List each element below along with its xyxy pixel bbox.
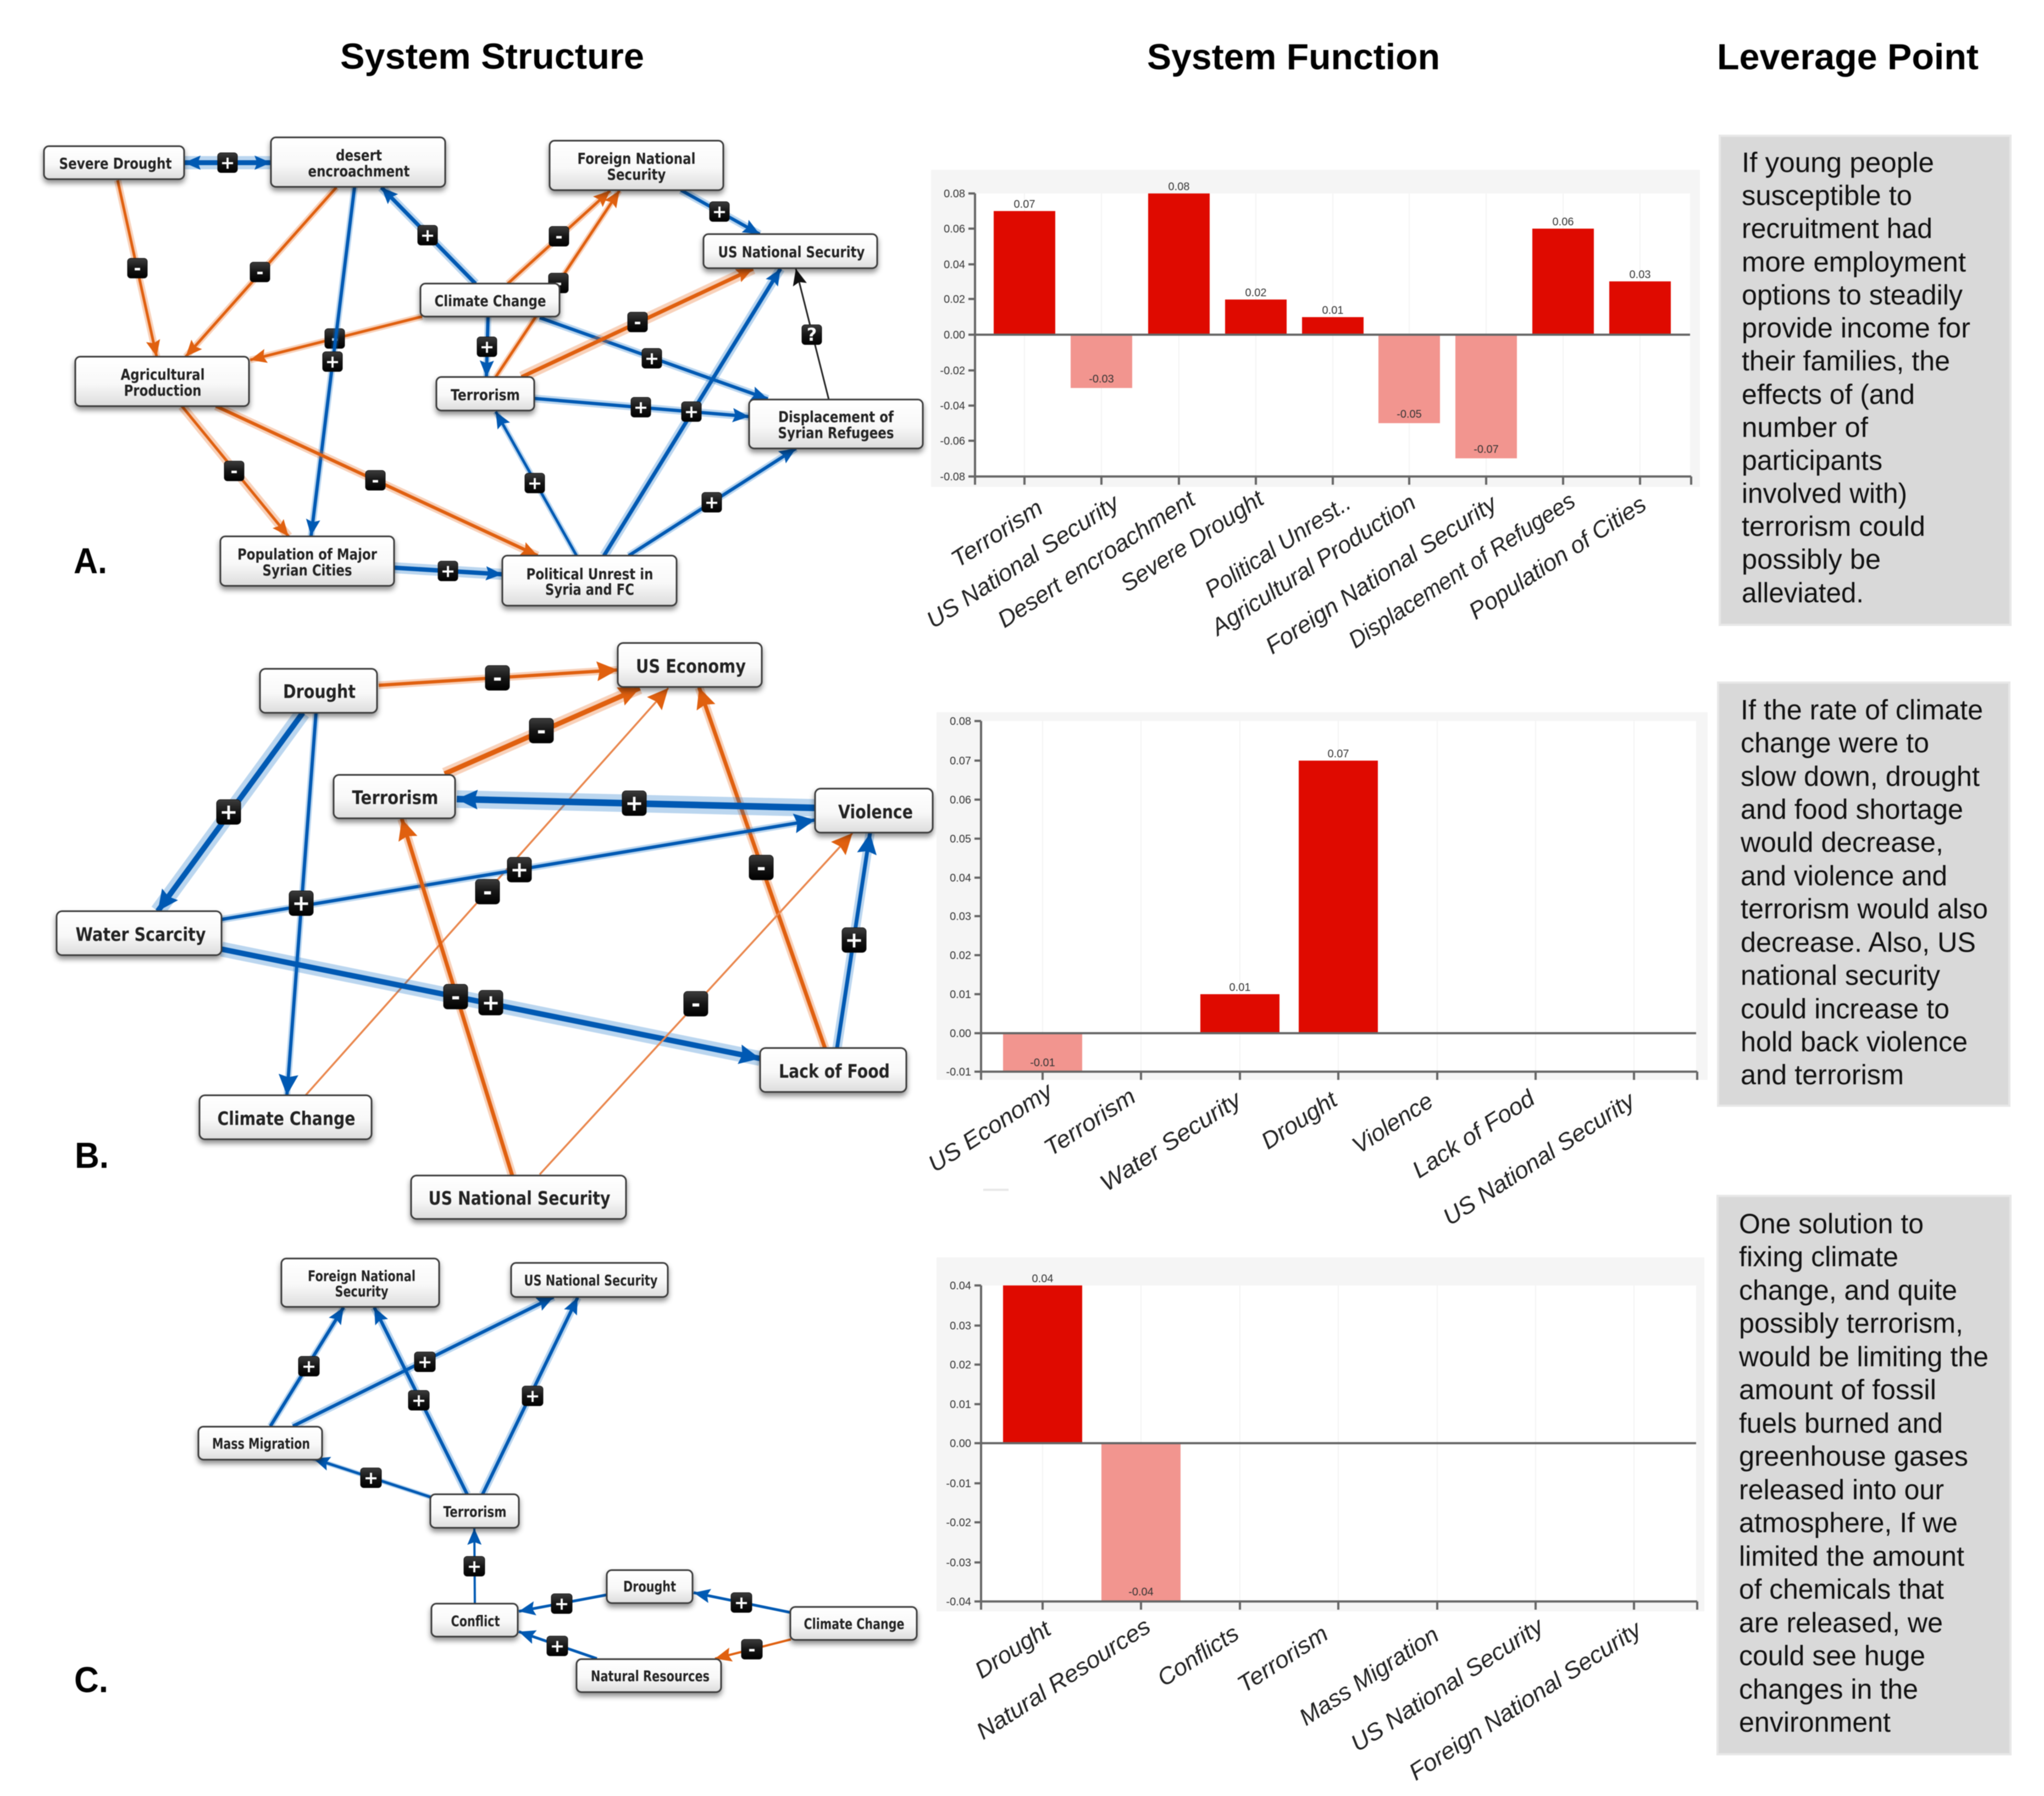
- node: Political Unrest in Syria and FC: Political Unrest in: [527, 565, 653, 583]
- y axis labels: 0.08: [944, 188, 965, 200]
- y axis labels: 0.05: [950, 833, 971, 845]
- category labels: Water Security: [1095, 1085, 1247, 1196]
- y axis labels: -0.03: [946, 1557, 971, 1569]
- arrow: Conflict to Terrorism: +: [467, 1556, 481, 1577]
- bars: [1003, 761, 1378, 1072]
- arrow: Climate Change to Terrorism: [477, 317, 497, 377]
- node: US National Security: [411, 1176, 626, 1219]
- arrow: Climate Change to Terrorism: +: [480, 336, 494, 357]
- value labels: [1030, 748, 1349, 1069]
- heading: System Function: System Function: [1147, 36, 1440, 77]
- arrow: Lack of Food to Violence: [837, 833, 870, 1048]
- text panel: leverage point A: [1720, 136, 2010, 625]
- category labels: Conflicts: [1153, 1620, 1244, 1692]
- node: Population of Major Syrian Cities: [220, 536, 394, 586]
- heading: System Structure: System Structure: [340, 36, 644, 76]
- node: Terrorism: Terrorism: [443, 1504, 507, 1521]
- text panel: leverage point C: change, and quite: [1739, 1274, 1957, 1306]
- value labels: -0.03: [1089, 373, 1114, 385]
- arrow: Violence to Terrorism: [457, 791, 815, 816]
- text panel: leverage point C: fuels burned and: [1739, 1407, 1943, 1439]
- arrow: Severe Drought and desert encroachment feedback: [184, 152, 271, 173]
- node: Climate Change: [200, 1095, 372, 1139]
- arrow: Climate Change to desert encroachment: [381, 187, 475, 284]
- arrow: Agricultural Production to Political Unrest: [216, 406, 538, 556]
- arrow: Political Unrest to Terrorism: +: [528, 473, 542, 494]
- arrow: Political Unrest to US National Security: [604, 269, 780, 556]
- node: US National Security: [511, 1263, 668, 1297]
- y axis labels: 0.02: [950, 950, 971, 962]
- category labels: Foreign National Security: [1261, 490, 1503, 659]
- arrow: Climate Change to Natural Resources: [715, 1639, 791, 1660]
- text panel: leverage point C: [1718, 1196, 2010, 1754]
- text panel: leverage point C: changes in the: [1739, 1673, 1918, 1705]
- arrow: Terrorism to US Economy: [445, 688, 640, 774]
- category labels: [923, 1077, 1641, 1230]
- text panel: leverage point B: [1718, 683, 2009, 1106]
- arrow: desert encroachment to Population of Major Syrian Cities: +: [325, 351, 340, 372]
- arrow: Climate Change to Displacement of Syrian Refugees: [540, 318, 768, 399]
- node: Displacement of Syrian Refugees: Displacement of: [778, 408, 894, 426]
- panel label: C: C.: [74, 1659, 108, 1700]
- value labels: -0.07: [1474, 444, 1499, 456]
- arrow: Water Scarcity to Violence: +: [510, 857, 529, 883]
- text panel: leverage point B: national security: [1741, 960, 1940, 991]
- node: Climate Change: Climate Change: [434, 292, 546, 310]
- arrow: Mass Migration to US National Security: [293, 1297, 553, 1426]
- arrow: Drought to US Economy: [379, 666, 618, 691]
- arrow: Political Unrest to US National Security: +: [684, 401, 699, 422]
- arrow: desert encroachment to Population of Major Syrian Cities: [311, 187, 354, 536]
- arrow: Terrorism to US National Security: -: [634, 312, 641, 332]
- node: Mass Migration: [198, 1427, 322, 1460]
- category labels: US National Security: [922, 489, 1125, 634]
- y axis labels: 0.01: [950, 1399, 971, 1411]
- node: Climate Change: Climate Change: [804, 1616, 905, 1633]
- y axis labels: 0.04: [950, 1280, 971, 1292]
- arrow: Political Unrest to Displacement of Syrian Refugees: +: [705, 492, 719, 513]
- arrow: Terrorism to Foreign National Security: +: [412, 1390, 426, 1411]
- category labels: Population of Cities: [1464, 491, 1651, 625]
- arrow: Terrorism to Foreign National Security: [496, 191, 619, 377]
- y axis labels: 0.07: [950, 755, 971, 767]
- node: US National Security: US National Security: [524, 1272, 658, 1289]
- arrow: Drought to Climate Change: [287, 713, 316, 1095]
- text panel: leverage point A: involved with): [1742, 478, 1907, 509]
- node: Terrorism: Terrorism: [352, 787, 439, 809]
- arrow: Violence to Terrorism: +: [625, 791, 644, 816]
- node: desert encroachment: encroachment: [308, 162, 410, 180]
- node: Drought: [607, 1570, 693, 1603]
- y axis labels: 0.03: [950, 1320, 971, 1332]
- node: US Economy: US Economy: [636, 656, 746, 678]
- arrow: Severe Drought to Agricultural Production: [118, 180, 157, 357]
- arrow: Displacement of Syrian Refugees to US National Security: ?: [807, 324, 817, 345]
- y axis labels: 0.08: [950, 716, 971, 728]
- text panel: leverage point A: options to steadily: [1742, 279, 1963, 311]
- y axis labels: 0.06: [950, 794, 971, 806]
- node: US National Security: US National Security: [429, 1188, 610, 1210]
- arrow: Climate Change to US Economy: -: [483, 879, 492, 905]
- y axis labels: 0.01: [950, 989, 971, 1001]
- text panel: leverage point A: effects of (and: [1742, 379, 1915, 410]
- arrow: Terrorism to US National Security: [483, 1298, 578, 1494]
- text panel: leverage point B: terrorism would also: [1741, 893, 1988, 924]
- arrow: Mass Migration to US National Security: +: [418, 1351, 432, 1372]
- arrow: Water Scarcity to Violence: [221, 820, 815, 919]
- category labels: Violence: [1348, 1088, 1438, 1159]
- arrow: Conflict to Terrorism: [464, 1528, 485, 1604]
- arrow: Lack of Food to US Economy: -: [757, 855, 766, 880]
- y axis labels: 0.02: [950, 1359, 971, 1371]
- category labels: [922, 485, 1651, 659]
- axes: [974, 1285, 1697, 1610]
- node: Population of Major Syrian Cities: Syrian Cities: [263, 561, 352, 579]
- text panel: leverage point C: environment: [1739, 1706, 1891, 1738]
- arrow: Natural Resources to Conflict: +: [550, 1636, 564, 1656]
- arrow: Climate Change to US Economy: [306, 688, 668, 1095]
- y axis labels: 0.00: [950, 1438, 971, 1450]
- arrow: Terrorism to Foreign National Security: -: [555, 273, 562, 293]
- node: Drought: Drought: [623, 1578, 676, 1595]
- node: Natural Resources: [577, 1659, 721, 1692]
- arrow: Agricultural Production to Population of Major Syrian Cities: -: [230, 461, 238, 481]
- arrow: Drought to Water Scarcity: [158, 713, 303, 911]
- node: Lack of Food: Lack of Food: [779, 1061, 890, 1083]
- chart: system function A: [922, 170, 1700, 659]
- node: Water Scarcity: [57, 911, 221, 955]
- arrow: Lack of Food to US Economy: [699, 688, 825, 1048]
- node: Terrorism: [430, 1494, 519, 1528]
- arrow: Terrorism to US Economy: -: [537, 718, 546, 744]
- arrow: Climate Change to Agricultural Production: [250, 317, 422, 360]
- category labels: [970, 1612, 1647, 1786]
- text panel: leverage point A: If young people: [1742, 147, 1934, 178]
- category labels: Lack of Food: [1408, 1084, 1541, 1184]
- text panel: leverage point C: greenhouse gases: [1739, 1440, 1968, 1472]
- y axis labels: -0.04: [946, 1596, 971, 1608]
- arrow: Agricultural Production to Population of Major Syrian Cities: [182, 406, 289, 536]
- text panel: leverage point B: hold back violence: [1741, 1026, 1968, 1057]
- panel: causal loop diagram A: [44, 137, 923, 606]
- text panel: leverage point C: are released, we: [1739, 1607, 1943, 1638]
- y axis labels: -0.01: [946, 1478, 971, 1490]
- value labels: -0.05: [1397, 408, 1422, 420]
- arrow: Drought to Climate Change: +: [292, 891, 311, 916]
- value labels: [1032, 1273, 1154, 1598]
- arrow: desert encroachment to Agricultural Production: -: [256, 262, 264, 282]
- category labels: Severe Drought: [1116, 485, 1270, 597]
- category labels: Displacement of Refugees: [1344, 487, 1580, 653]
- text panel: leverage point B: would decrease,: [1740, 827, 1943, 858]
- value labels: 0.08: [1168, 181, 1189, 193]
- node: Agricultural Production: Production: [124, 381, 201, 400]
- bars: [994, 193, 1671, 458]
- value labels: 0.03: [1630, 269, 1650, 281]
- arrow: Climate Change to desert encroachment: +: [420, 225, 435, 246]
- value labels: 0.01: [1322, 304, 1343, 317]
- y axis labels: -0.02: [940, 365, 965, 377]
- arrow: Drought to Conflict: +: [555, 1593, 569, 1614]
- y axis labels: -0.04: [940, 400, 965, 412]
- text panel: leverage point B: decrease. Also, US: [1741, 927, 1976, 958]
- y axis labels: 0.06: [944, 223, 965, 235]
- node: Foreign National Security: Foreign National: [577, 149, 696, 168]
- arrow: Climate Change to Natural Resources: -: [748, 1639, 756, 1660]
- arrow: Severe Drought to Agricultural Production: -: [134, 258, 141, 279]
- y axis labels: 0.04: [944, 259, 965, 271]
- category labels: Desert encroachment: [993, 485, 1201, 633]
- node: US National Security: [704, 234, 877, 268]
- node: Terrorism: [334, 775, 455, 818]
- node: Population of Major Syrian Cities: Population of Major: [237, 545, 377, 563]
- arrow: Political Unrest to Terrorism: [496, 412, 577, 556]
- arrow: Displacement of Syrian Refugees to US National Security: [796, 269, 829, 400]
- y axis labels: 0.00: [950, 1028, 971, 1040]
- node: Drought: Drought: [283, 681, 356, 703]
- arrow: Terrorism to Displacement of Syrian Refugees: [534, 397, 749, 418]
- value labels: 0.01: [1229, 982, 1250, 994]
- text panel: leverage point A: terrorism could: [1742, 511, 1925, 542]
- arrow: US National Security to Violence: [540, 833, 852, 1174]
- arrow: Natural Resources to Conflict: [519, 1632, 597, 1659]
- panel label: B: B.: [75, 1135, 109, 1176]
- node: Water Scarcity: Water Scarcity: [76, 924, 206, 946]
- y axis labels: [940, 188, 965, 483]
- text panel: leverage point C: amount of fossil: [1739, 1374, 1936, 1405]
- arrow: Climate Change to Displacement of Syrian Refugees: +: [645, 348, 659, 369]
- arrow: Mass Migration to Foreign National Security: [270, 1307, 344, 1426]
- arrow: Drought to US Economy: -: [493, 666, 502, 691]
- text panel: leverage point C: One solution to: [1739, 1208, 1924, 1239]
- chart: system function C: [937, 1257, 1704, 1786]
- panel label: A: A.: [74, 540, 107, 581]
- category labels: Terrorism: [1039, 1083, 1140, 1161]
- text panel: leverage point A: recruitment had: [1742, 213, 1932, 244]
- node: Foreign National Security: Security: [607, 165, 666, 184]
- arrow: US National Security to Terrorism: -: [451, 984, 460, 1010]
- category labels: Terrorism: [946, 495, 1048, 573]
- text panel: leverage point A: susceptible to: [1742, 180, 1912, 211]
- arrow: Lack of Food to Violence: +: [845, 928, 863, 953]
- node: Violence: [815, 789, 933, 833]
- node: Foreign National Security: [281, 1259, 439, 1307]
- category labels: Natural Resources: [972, 1613, 1155, 1745]
- arrow: Climate Change to Foreign National Security: [508, 191, 610, 284]
- category labels: Political Unrest..: [1200, 490, 1355, 603]
- heading: Leverage Point: Leverage Point: [1717, 36, 1979, 77]
- node: Drought: [260, 669, 377, 713]
- value labels: 0.04: [1032, 1273, 1053, 1285]
- node: Mass Migration: Mass Migration: [212, 1435, 310, 1453]
- node: Agricultural Production: [75, 357, 249, 406]
- y axis labels: -0.06: [940, 435, 965, 447]
- y axis labels: -0.01: [946, 1066, 971, 1078]
- arrow: US National Security to Violence: -: [691, 991, 700, 1017]
- arrow: Agricultural Production to Political Unrest: -: [372, 470, 379, 491]
- node: Displacement of Syrian Refugees: Syrian Refugees: [778, 424, 894, 442]
- node: desert encroachment: [271, 137, 445, 187]
- category labels: Mass Migration: [1294, 1621, 1444, 1731]
- arrow: Water Scarcity to Lack of Food: [221, 949, 760, 1058]
- arrow: desert encroachment to Agricultural Production: [186, 187, 336, 357]
- panel: causal loop diagram C: [198, 1259, 917, 1692]
- value labels: -0.04: [1128, 1586, 1154, 1598]
- y axis labels: -0.08: [940, 471, 965, 483]
- text panel: leverage point C: would be limiting the: [1738, 1341, 1988, 1372]
- arrow: Water Scarcity to Lack of Food: +: [481, 990, 500, 1016]
- text panel: leverage point B: and terrorism: [1741, 1059, 1904, 1090]
- category labels: Foreign National Security: [1404, 1615, 1647, 1786]
- y axis labels: 0.00: [944, 329, 965, 341]
- node: Foreign National Security: [550, 141, 723, 190]
- text panel: leverage point A: possibly be: [1742, 544, 1881, 575]
- node: Terrorism: Terrorism: [451, 386, 520, 404]
- arrow: Political Unrest to Displacement of Syrian Refugees: [629, 448, 796, 556]
- arrow: Severe Drought and desert encroachment feedback: +: [220, 152, 235, 173]
- y axis labels: 0.03: [950, 911, 971, 923]
- category labels: Terrorism: [1233, 1620, 1333, 1698]
- node: Climate Change: [790, 1607, 917, 1640]
- arrow: Terrorism to US National Security: [522, 269, 753, 377]
- y axis labels: 0.04: [950, 872, 971, 884]
- text panel: leverage point C: fixing climate: [1739, 1241, 1898, 1272]
- node: Agricultural Production: Agricultural: [121, 365, 204, 384]
- value labels: -0.01: [1030, 1057, 1055, 1069]
- text panel: leverage point C: released into our: [1739, 1474, 1944, 1505]
- arrow: Population of Major Syrian Cities to Political Unrest: +: [441, 561, 455, 581]
- node: Severe Drought: Severe Drought: [59, 154, 171, 173]
- node: US Economy: [618, 643, 762, 687]
- text panel: leverage point C: could see huge: [1739, 1640, 1925, 1671]
- arrow: Foreign National Security to US National Security: [681, 190, 760, 234]
- value labels: 0.02: [1245, 287, 1266, 299]
- category labels: US Economy: [923, 1077, 1059, 1178]
- category labels: Drought: [1256, 1086, 1343, 1155]
- arrow: US National Security to Terrorism: [402, 819, 512, 1176]
- node: Lack of Food: [760, 1048, 906, 1092]
- text panel: leverage point B: could increase to: [1741, 993, 1949, 1024]
- y axis labels: [946, 716, 971, 1078]
- arrow: Terrorism to Displacement of Syrian Refugees: +: [634, 397, 648, 418]
- arrow: Climate Change to Agricultural Production: -: [331, 328, 339, 349]
- text panel: leverage point C: of chemicals that: [1739, 1573, 1944, 1605]
- node: Terrorism: [436, 377, 534, 411]
- category labels: Drought: [970, 1615, 1056, 1684]
- text panel: leverage point A: more employment: [1742, 246, 1966, 278]
- arrow: Foreign National Security to US National Security: +: [712, 201, 727, 222]
- axes: [968, 193, 1691, 485]
- text panel: leverage point A: provide income for: [1742, 312, 1970, 343]
- node: Violence: Violence: [838, 801, 913, 823]
- panel: causal loop diagram B: [57, 643, 933, 1219]
- text panel: leverage point C: possibly terrorism,: [1739, 1307, 1963, 1339]
- arrow: Climate Change to Drought: +: [734, 1592, 749, 1613]
- text panel: leverage point C: limited the amount: [1739, 1540, 1964, 1572]
- node: Severe Drought: [44, 146, 184, 179]
- text panel: leverage point A: alleviated.: [1742, 577, 1864, 608]
- text panel: leverage point B: slow down, drought: [1741, 761, 1980, 792]
- node: Foreign National Security: Foreign National: [308, 1268, 416, 1285]
- text panel: leverage point A: participants: [1742, 445, 1882, 476]
- node: Natural Resources: Natural Resources: [591, 1668, 710, 1685]
- node: Political Unrest in Syria and FC: Syria and FC: [545, 580, 634, 598]
- arrow: Terrorism to Mass Migration: [313, 1459, 430, 1497]
- axes: [974, 721, 1697, 1080]
- node: Climate Change: [420, 284, 560, 317]
- text panel: leverage point B: and food shortage: [1741, 794, 1963, 825]
- value labels: 0.06: [1553, 216, 1574, 228]
- value labels: 0.07: [1014, 198, 1035, 210]
- arrow: Drought to Water Scarcity: +: [219, 800, 238, 825]
- node: US National Security: US National Security: [718, 243, 865, 261]
- node: Displacement of Syrian Refugees: [749, 400, 923, 448]
- text panel: leverage point A: number of: [1742, 412, 1869, 443]
- arrow: Drought to Conflict: [519, 1593, 607, 1614]
- bars: [1003, 1285, 1181, 1601]
- arrow: Climate Change to Drought: [694, 1592, 790, 1613]
- node: Conflict: [431, 1604, 518, 1637]
- node: desert encroachment: desert: [336, 146, 382, 164]
- arrow: Terrorism to Foreign National Security: [374, 1307, 467, 1494]
- arrow: Climate Change to Foreign National Security: -: [555, 226, 563, 247]
- y axis labels: 0.02: [944, 293, 965, 306]
- chart: system function B: [923, 712, 1708, 1230]
- arrow: Terrorism to US National Security: +: [525, 1385, 540, 1406]
- value labels: 0.07: [1328, 748, 1349, 760]
- arrow: Mass Migration to Foreign National Security: +: [302, 1356, 316, 1377]
- category labels: US National Security: [1346, 1612, 1549, 1757]
- arrow: Population of Major Syrian Cities to Political Unrest: [394, 561, 502, 581]
- text panel: leverage point A: their families, the: [1742, 345, 1950, 376]
- y axis labels: -0.02: [946, 1517, 971, 1529]
- y axis labels: [946, 1280, 971, 1608]
- text panel: leverage point C: atmosphere, If we: [1739, 1507, 1958, 1538]
- arrow: Terrorism to Mass Migration: +: [364, 1467, 378, 1488]
- node: Political Unrest in Syria and FC: [502, 556, 677, 606]
- value labels: [1014, 181, 1650, 456]
- node: Foreign National Security: Security: [335, 1283, 389, 1300]
- text panel: leverage point B: If the rate of climate: [1741, 694, 1983, 725]
- node: Climate Change: Climate Change: [218, 1108, 355, 1130]
- category labels: Agricultural Production: [1205, 489, 1421, 642]
- text panel: leverage point B: change were to: [1741, 727, 1929, 758]
- text panel: leverage point B: and violence and: [1741, 860, 1947, 891]
- node: Conflict: Conflict: [451, 1613, 500, 1630]
- category labels: US National Security: [1438, 1087, 1641, 1230]
